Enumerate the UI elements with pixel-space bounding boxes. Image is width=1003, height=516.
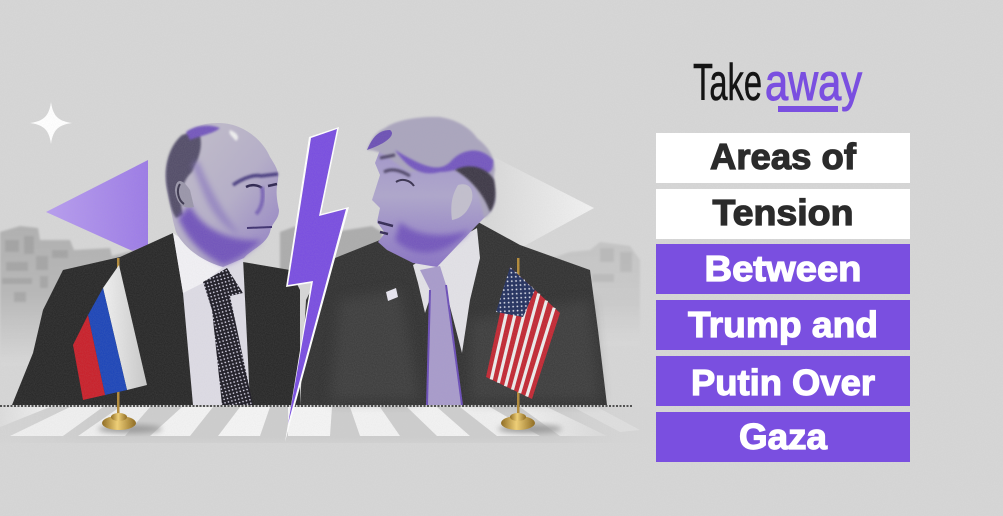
Trump figure [300,117,607,405]
headline panel: Tension [656,189,910,239]
infographic canvas [0,62,910,462]
sparkle icon [30,102,72,144]
headline panel: Between: Between [704,248,862,289]
Trump suit [300,222,607,405]
Takeaway logo [693,54,862,112]
headline panel: Trump and: Trump and [688,304,878,345]
headline panel: Between [656,244,910,294]
headline panel: Areas of: Areas of [710,136,857,177]
Trump neck and head [372,125,493,267]
headline panel: Areas of [656,133,910,183]
headline panel: Trump and [656,300,910,350]
Trump tie [420,266,462,405]
American desk flag [486,258,562,433]
Putin tie [203,268,253,405]
Putin suit [12,233,300,405]
Trump lapel pin [386,288,398,301]
headline panel: Tension: Tension [712,192,854,233]
headline panel: Putin Over [656,356,910,406]
Russian desk flag [73,258,162,433]
Takeaway logo: away [765,54,862,112]
lightning bolt [285,127,349,442]
Putin shirt [173,233,250,405]
headline panel: Gaza [656,412,910,462]
right white triangle [480,150,594,270]
Putin figure [12,123,300,405]
Takeaway logo: Take [693,54,762,112]
ruined city backdrop [0,226,640,365]
Trump hair and shadows [367,117,495,253]
crosswalk stripes [6,407,587,439]
headline panel: Gaza: Gaza [739,416,828,457]
Putin hair and shadows [166,126,278,265]
Trump shirt [413,228,480,353]
Putin collar [173,233,223,293]
Putin neck and head [165,123,279,267]
left purple triangle [46,160,148,258]
table edge [0,405,632,407]
Trump suit highlights [330,290,600,400]
headline panel: Putin Over: Putin Over [691,362,875,403]
